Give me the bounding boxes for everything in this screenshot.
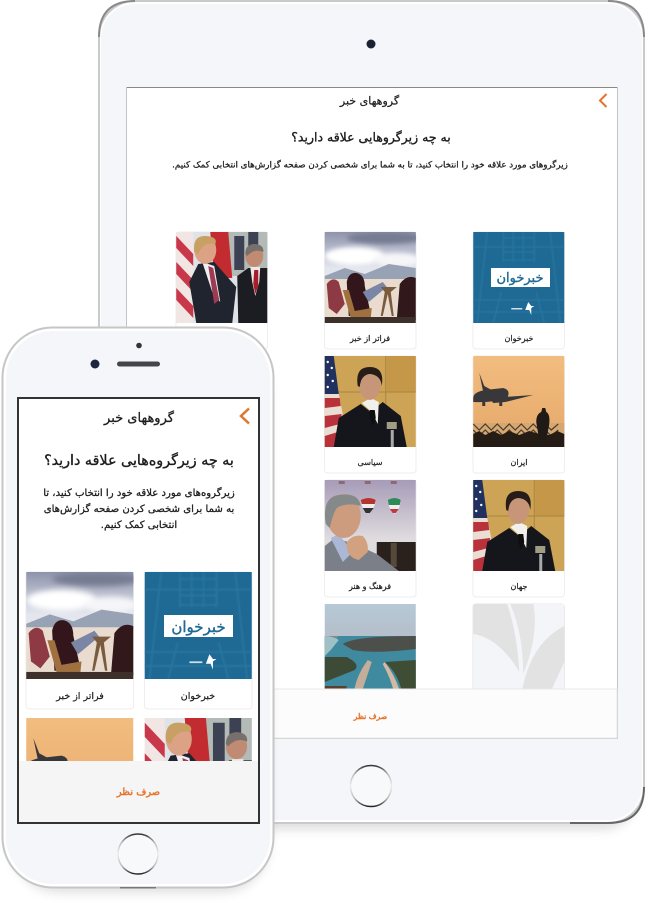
phone card: khabarkhan: خبرخوان <box>171 618 226 636</box>
card: khabarkhan: خبرخوان <box>496 271 544 286</box>
phone speaker <box>117 362 160 366</box>
card: iran: ایران <box>511 458 527 467</box>
tablet home button <box>350 766 392 806</box>
card: khabarkhan <box>473 232 564 349</box>
tablet body <box>99 1 644 823</box>
phone skip bar: صرف نظر <box>116 787 160 798</box>
phone home button <box>118 834 158 874</box>
card: top story <box>176 232 268 349</box>
tablet back arrow <box>600 94 606 107</box>
tablet skip bar <box>127 689 617 738</box>
tablet screen <box>126 87 618 738</box>
phone card: khabarkhan: خبرخوان <box>181 691 215 702</box>
phone description: به شما برای شخصی کردن صفحه گزارش‌های <box>44 502 234 515</box>
tablet skip bar: صرف نظر <box>353 712 387 721</box>
card: politics <box>324 356 416 473</box>
phone card: beyond the news: فراتر از خبر <box>55 691 104 702</box>
phone description: انتخابی کمک کنیم. <box>101 520 177 531</box>
card: world <box>473 480 564 597</box>
phone device <box>2 328 274 893</box>
card: khabarkhan: خبرخوان <box>505 334 534 343</box>
phone heading: به چه زیرگروه‌هایی علاقه دارید؟ <box>44 452 234 469</box>
phone card: iran <box>26 718 134 761</box>
phone card: beyond the news <box>26 572 141 709</box>
card: beyond the news <box>324 232 423 349</box>
card: politics: سیاسی <box>358 458 383 467</box>
phone description <box>43 486 235 531</box>
phone header title: گروههای خبر <box>103 410 175 426</box>
card: culture and art: فرهنگ و هنر <box>348 581 391 591</box>
phone card: top story <box>144 718 252 761</box>
phone body <box>2 328 274 888</box>
card: beyond the news: فراتر از خبر <box>349 334 390 343</box>
phone front dot <box>136 343 142 348</box>
phone back arrow <box>241 408 249 424</box>
tablet heading: به چه زیرگروهایی علاقه دارید؟ <box>291 130 451 146</box>
phone camera <box>90 360 100 368</box>
card: placeholder <box>473 604 564 695</box>
phone card: khabarkhan <box>144 572 252 709</box>
card: world: جهان <box>511 582 528 591</box>
tablet category grid <box>176 232 564 695</box>
phone skip bar <box>19 761 258 822</box>
tablet header title: گروههای خبر <box>339 94 400 108</box>
card: culture and art <box>324 480 416 597</box>
tablet device <box>99 1 644 830</box>
card: river <box>325 604 416 695</box>
phone description: زیرگروه‌های مورد علاقه خود را انتخاب کنید، تا <box>43 486 235 499</box>
tablet description: زیرگروهای مورد علاقه خود را انتخاب کنید، تا به شما برای شخصی کردن صفحه گزارش‌های انتخابی کمک کنیم. <box>172 160 568 170</box>
phone screen <box>18 398 259 825</box>
phone category grid <box>26 572 252 761</box>
tablet camera <box>366 40 376 48</box>
card: iran <box>473 356 564 473</box>
